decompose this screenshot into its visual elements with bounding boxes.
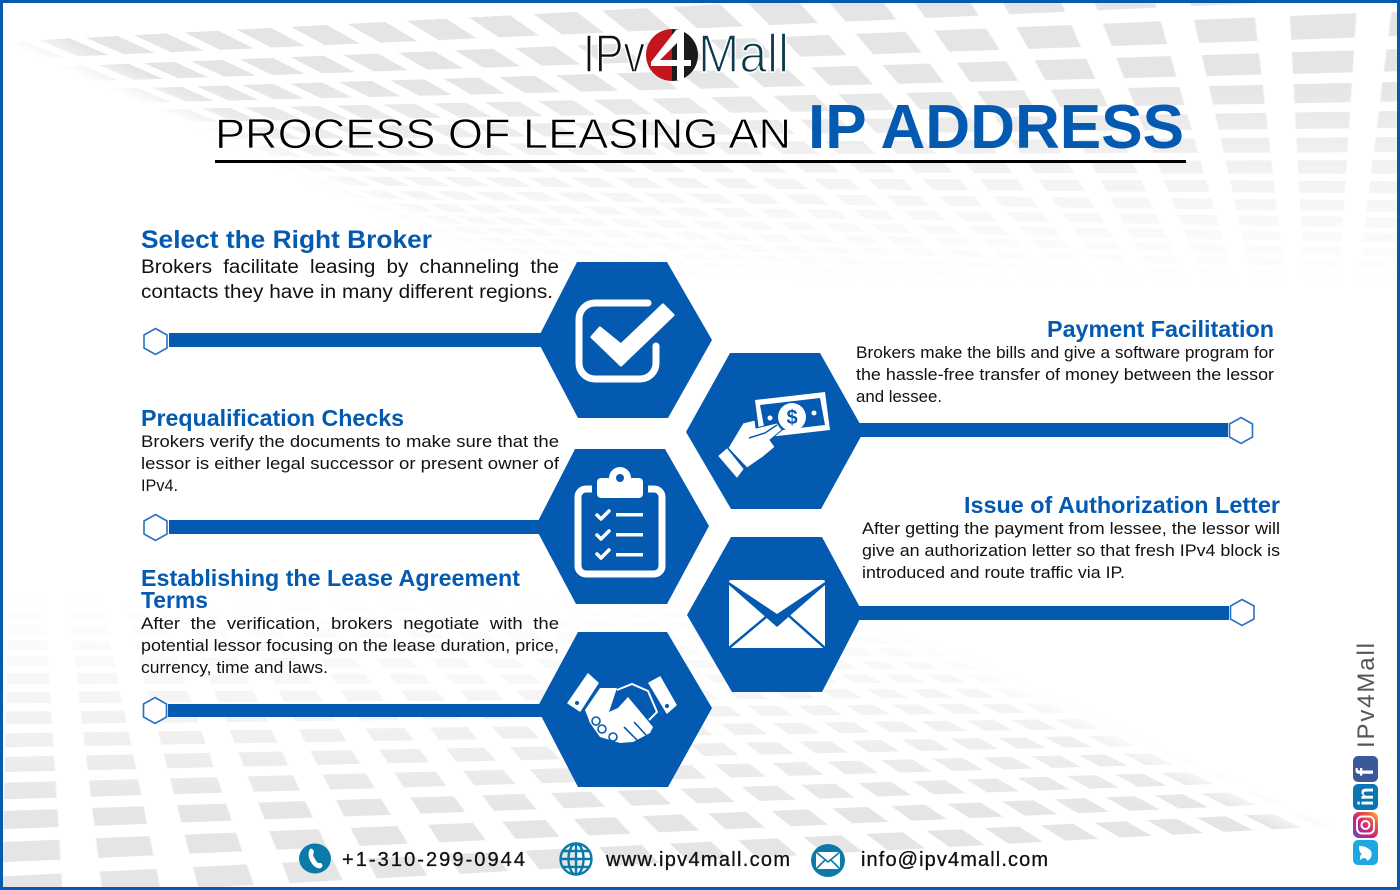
icon: facebook: f bbox=[1352, 767, 1379, 776]
description bbox=[856, 343, 1274, 406]
logo bbox=[583, 24, 789, 84]
logo badge bbox=[646, 29, 698, 81]
description: Brokers facilitate leasing by channeling the bbox=[141, 257, 559, 278]
description bbox=[862, 519, 1280, 582]
phone contact: +1-310-299-0944 bbox=[342, 849, 525, 871]
description: currency, time and laws. bbox=[141, 658, 328, 677]
background: lower perspective grid bbox=[3, 680, 1300, 887]
hexagon icon: envelope bbox=[687, 537, 863, 692]
heading bbox=[141, 565, 520, 613]
step: Prequalification Checks bbox=[141, 405, 709, 604]
email contact: info@ipv4mall.com bbox=[861, 849, 1048, 871]
description: potential lessor focusing on the lease duration, price, bbox=[141, 636, 559, 655]
step: Issue of Authorization Letter bbox=[687, 492, 1280, 692]
hexagon icon: handshake bbox=[537, 632, 712, 787]
title bbox=[215, 93, 1186, 163]
description: IPv4. bbox=[141, 476, 178, 495]
heading: Terms bbox=[141, 587, 208, 613]
description: After getting the payment from lessee, the lessor will bbox=[862, 519, 1280, 538]
step: Establishing the Lease Agreement Terms bbox=[141, 565, 712, 787]
footer contacts bbox=[299, 843, 1048, 877]
heading: Select the Right Broker bbox=[141, 226, 432, 254]
connector bbox=[144, 328, 544, 354]
heading: Establishing the Lease Agreement bbox=[141, 565, 520, 591]
heading: Payment Facilitation bbox=[1047, 316, 1274, 342]
background: upper perspective grid bbox=[40, 3, 1397, 204]
description: After the verification, brokers negotiate with the bbox=[141, 614, 559, 633]
description: introduced and route traffic via IP. bbox=[862, 563, 1125, 582]
logo: IPv bbox=[583, 24, 645, 84]
description: Brokers make the bills and give a software program for bbox=[856, 343, 1274, 362]
heading: Issue of Authorization Letter bbox=[964, 492, 1280, 518]
description bbox=[141, 432, 559, 495]
heading: Prequalification Checks bbox=[141, 405, 404, 431]
icon: twitter bbox=[1353, 840, 1378, 865]
hexagon icon: money in hand bbox=[686, 353, 864, 509]
step: Select the Right Broker bbox=[141, 226, 712, 418]
vertical brand name: IPv4Mall bbox=[1353, 643, 1380, 748]
description: the hassle-free transfer of money between the lessor bbox=[856, 365, 1274, 384]
icon: instagram bbox=[1353, 812, 1378, 838]
website contact: www.ipv4mall.com bbox=[605, 849, 790, 871]
description bbox=[141, 257, 559, 303]
hexagon icon: money in hand: $ bbox=[786, 407, 798, 429]
website contact bbox=[560, 843, 790, 875]
icon: facebook bbox=[1352, 756, 1379, 782]
connector bbox=[144, 514, 541, 540]
email contact bbox=[811, 844, 1048, 877]
title: PROCESS OF LEASING AN bbox=[215, 110, 791, 157]
phone contact bbox=[299, 844, 525, 874]
description: contacts they have in many different regions. bbox=[141, 282, 553, 303]
icon: linkedin bbox=[1353, 784, 1378, 810]
sidebar brand and social icons bbox=[1352, 643, 1380, 865]
hexagon icon: checkbox bbox=[537, 262, 712, 418]
connector bbox=[144, 698, 543, 724]
description: lessor is either legal successor or present owner of bbox=[141, 454, 559, 473]
connector bbox=[856, 418, 1252, 444]
title: IP ADDRESS bbox=[808, 93, 1184, 162]
icon: linkedin: in bbox=[1355, 787, 1378, 806]
description: Brokers verify the documents to make sure that the bbox=[141, 432, 559, 451]
connector bbox=[858, 600, 1254, 626]
description bbox=[141, 614, 559, 677]
logo: Mall bbox=[698, 24, 789, 84]
description: and lessee. bbox=[856, 387, 942, 406]
description: give an authorization letter so that fresh IPv4 block is bbox=[862, 541, 1280, 560]
hexagon icon: clipboard bbox=[535, 449, 709, 604]
step: Payment Facilitation bbox=[686, 316, 1274, 509]
